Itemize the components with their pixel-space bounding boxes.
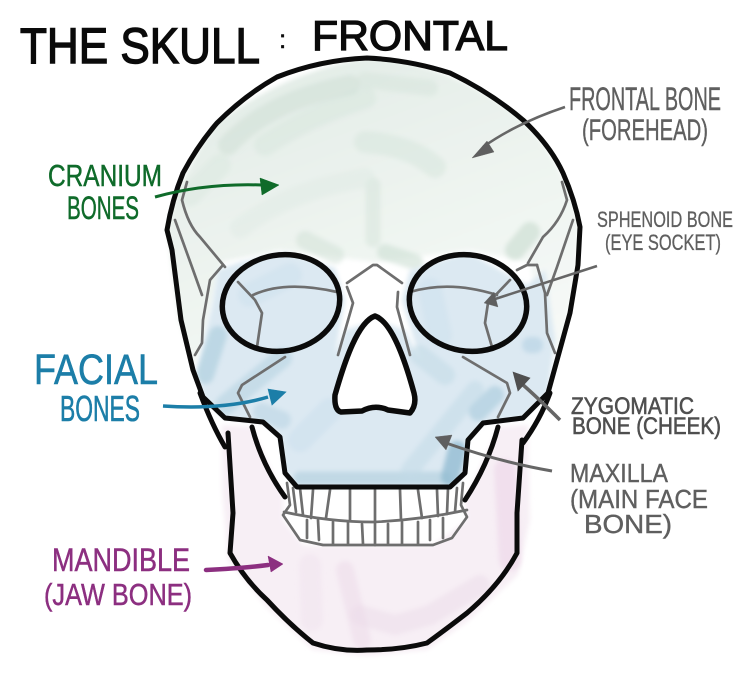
- maxilla colour wash: [197, 252, 555, 487]
- title: FRONTAL: [312, 12, 508, 59]
- label: maxilla: BONE): [584, 509, 672, 539]
- nose cavity: [335, 316, 415, 413]
- label: sphenoid bone: [484, 207, 733, 307]
- label: facial bones: BONES: [60, 388, 140, 429]
- fine bone sutures: [175, 182, 573, 545]
- label: mandible: [44, 542, 283, 612]
- label: zygomatic: [513, 372, 721, 440]
- label: facial bones: FACIAL: [34, 346, 158, 394]
- cranium colour wash: [167, 58, 580, 368]
- title: :: [279, 24, 286, 54]
- label: mandible: MANDIBLE: [52, 542, 190, 578]
- label: zygomatic: ZYGOMATIC: [571, 393, 694, 420]
- mandible colour wash: [222, 425, 530, 656]
- label: maxilla: MAXILLA: [570, 458, 669, 488]
- label: maxilla: (MAIN FACE: [570, 484, 708, 514]
- label: maxilla: [435, 435, 708, 539]
- title: THE SKULL: [20, 18, 260, 74]
- label: cranium bones: [48, 158, 279, 226]
- label: cranium bones: CRANIUM: [48, 158, 162, 193]
- label: cranium bones: BONES: [67, 190, 139, 226]
- skull outline: [167, 58, 580, 650]
- label: frontal bone: [472, 81, 721, 158]
- label: zygomatic: BONE (CHEEK): [572, 413, 721, 440]
- label: mandible: (JAW BONE): [44, 577, 192, 612]
- eye sockets: [215, 245, 534, 361]
- title: [20, 12, 508, 74]
- label: facial bones: [34, 346, 286, 429]
